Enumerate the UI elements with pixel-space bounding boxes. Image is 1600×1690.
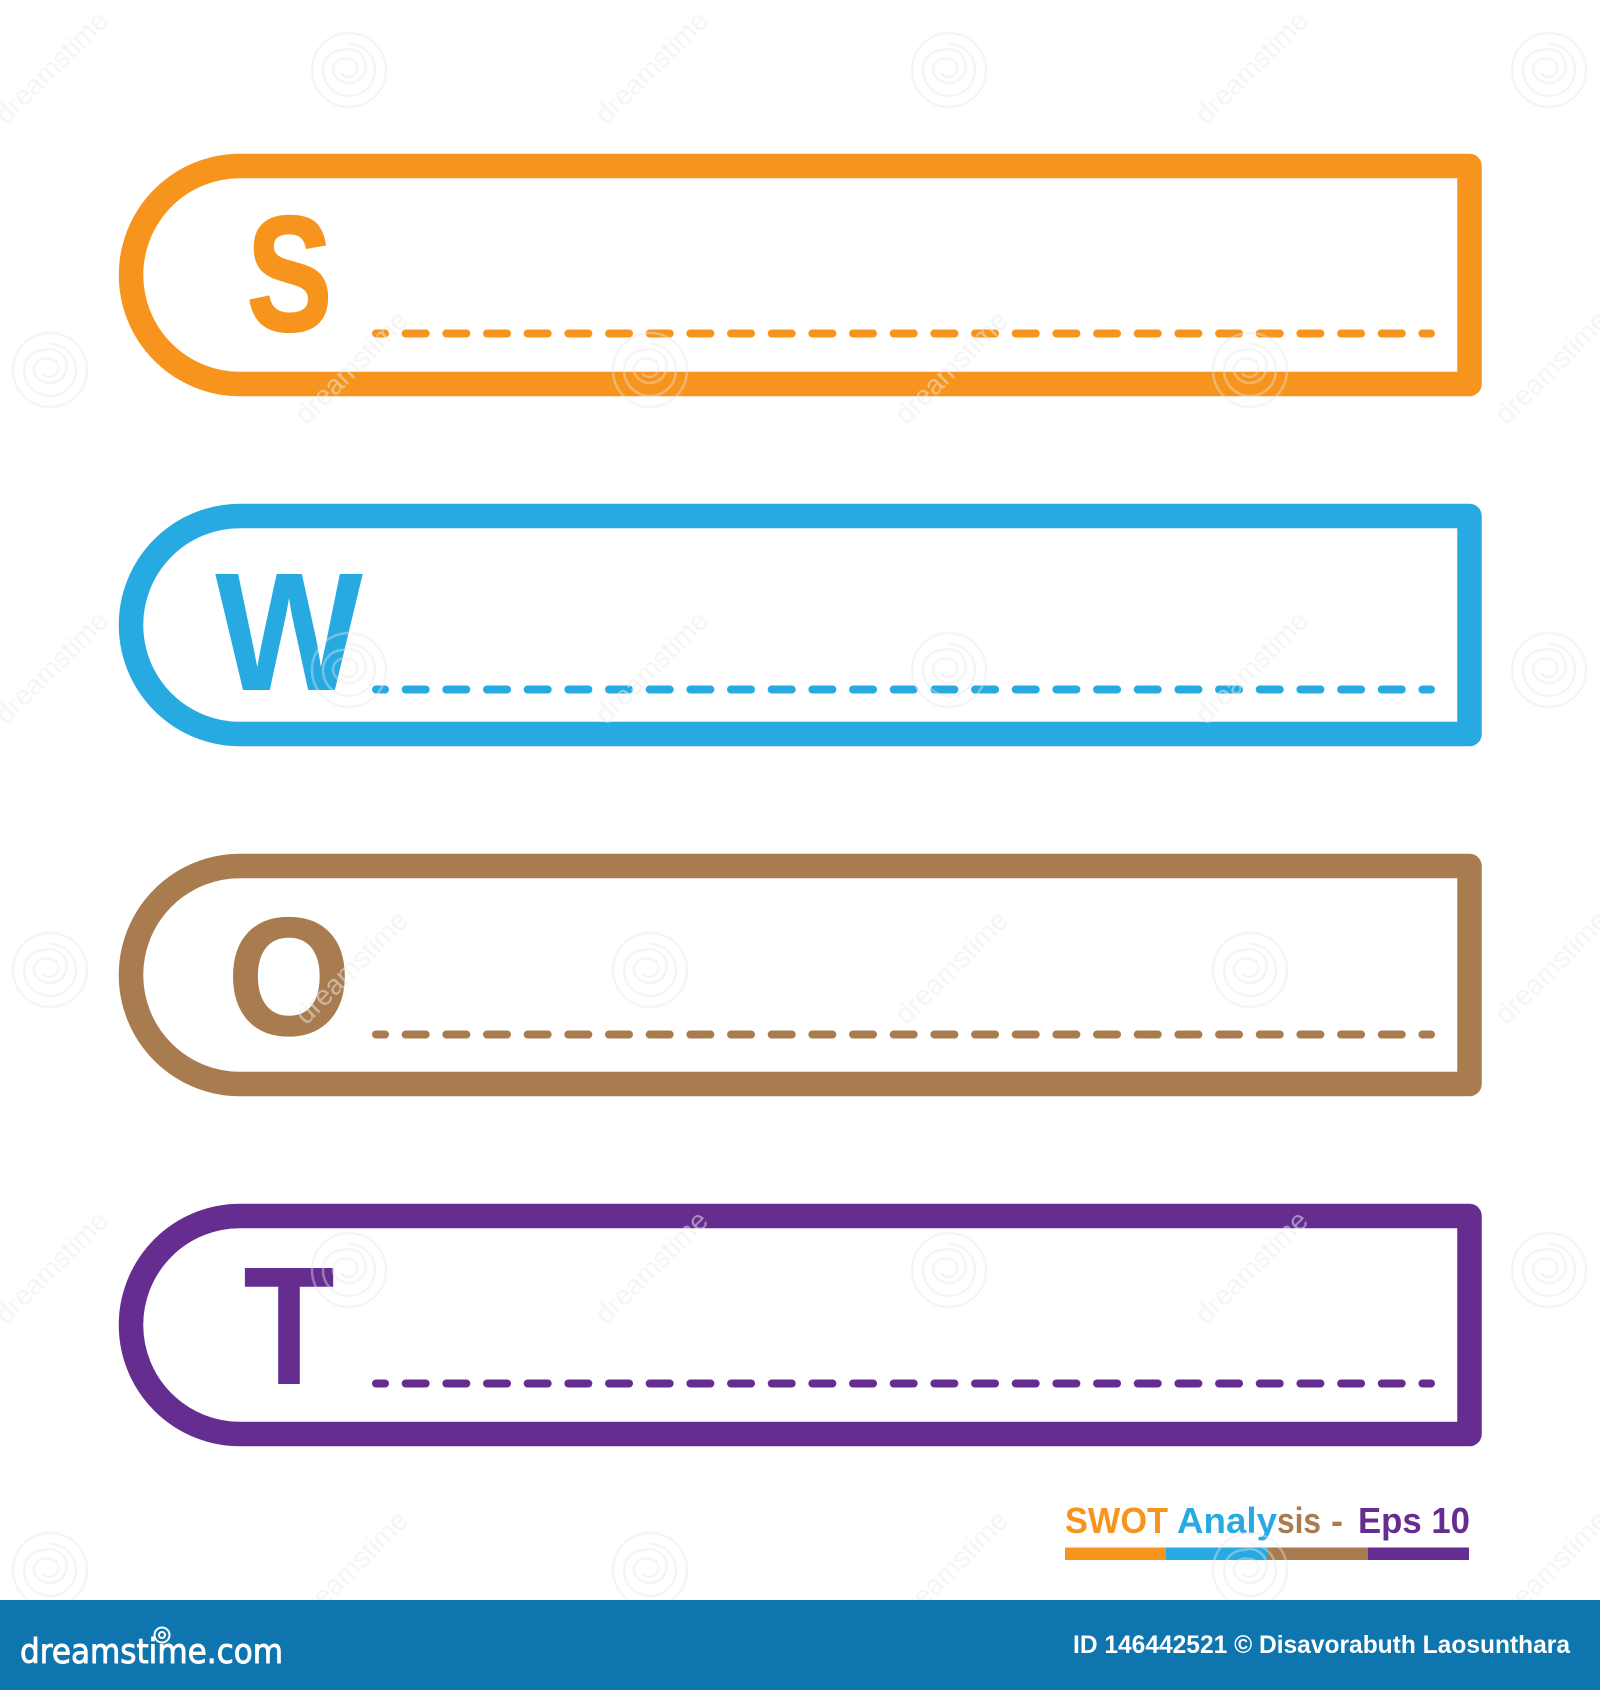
watermark spirals and text: dreamstime: [889, 1505, 1014, 1630]
letter W: W: [215, 539, 363, 726]
watermark spirals and text: dreamstime: [1189, 605, 1314, 730]
title: SWOT Analysis - Eps 10: [1065, 1500, 1470, 1541]
watermark spirals and text: dreamstime: [589, 605, 714, 730]
title: SWOT Analysis - Eps 10: Analy: [1177, 1500, 1277, 1541]
watermark spirals and text: dreamstime: [1189, 1205, 1314, 1330]
watermark spirals and text: dreamstime: [1189, 5, 1314, 130]
letter T: T: [243, 1232, 335, 1420]
footer band: [0, 1600, 1600, 1690]
watermark spirals and text: dreamstime: [289, 905, 414, 1030]
dashed line: W: [376, 686, 1431, 694]
panel: T threats: [131, 1216, 1470, 1434]
watermark spirals and text: dreamstime: [289, 1505, 414, 1630]
title: SWOT Analysis - Eps 10: SWOT: [1065, 1500, 1168, 1541]
colour bar legend: [1065, 1548, 1469, 1560]
icon: logo spiral: [154, 1628, 170, 1642]
panel: O opportunities: [131, 866, 1470, 1084]
dashed line: T: [376, 1380, 1431, 1388]
panel: S strengths: [131, 166, 1470, 384]
credit text: ID 146442521 © Disavorabuth Laosunthara: [1073, 1631, 1571, 1659]
letter O: O: [228, 884, 350, 1070]
watermark spirals and text: dreamstime: [889, 305, 1014, 430]
letter S: S: [247, 183, 332, 365]
title: SWOT Analysis - Eps 10: -: [1331, 1500, 1343, 1541]
watermark spirals and text: dreamstime: [589, 1205, 714, 1330]
watermark spirals and text: dreamstime: [289, 305, 414, 430]
title: SWOT Analysis - Eps 10: Eps 10: [1358, 1500, 1470, 1541]
panel: W weaknesses: [131, 516, 1470, 734]
logo text: dreamstime.com: dreamstime.com: [20, 1632, 283, 1672]
watermark spirals and text: dreamstime: [889, 905, 1014, 1030]
dashed line: S: [376, 330, 1431, 338]
dashed line: O: [376, 1030, 1431, 1038]
title: SWOT Analysis - Eps 10: sis: [1277, 1500, 1321, 1541]
watermark spirals and text: dreamstime: [589, 5, 714, 130]
